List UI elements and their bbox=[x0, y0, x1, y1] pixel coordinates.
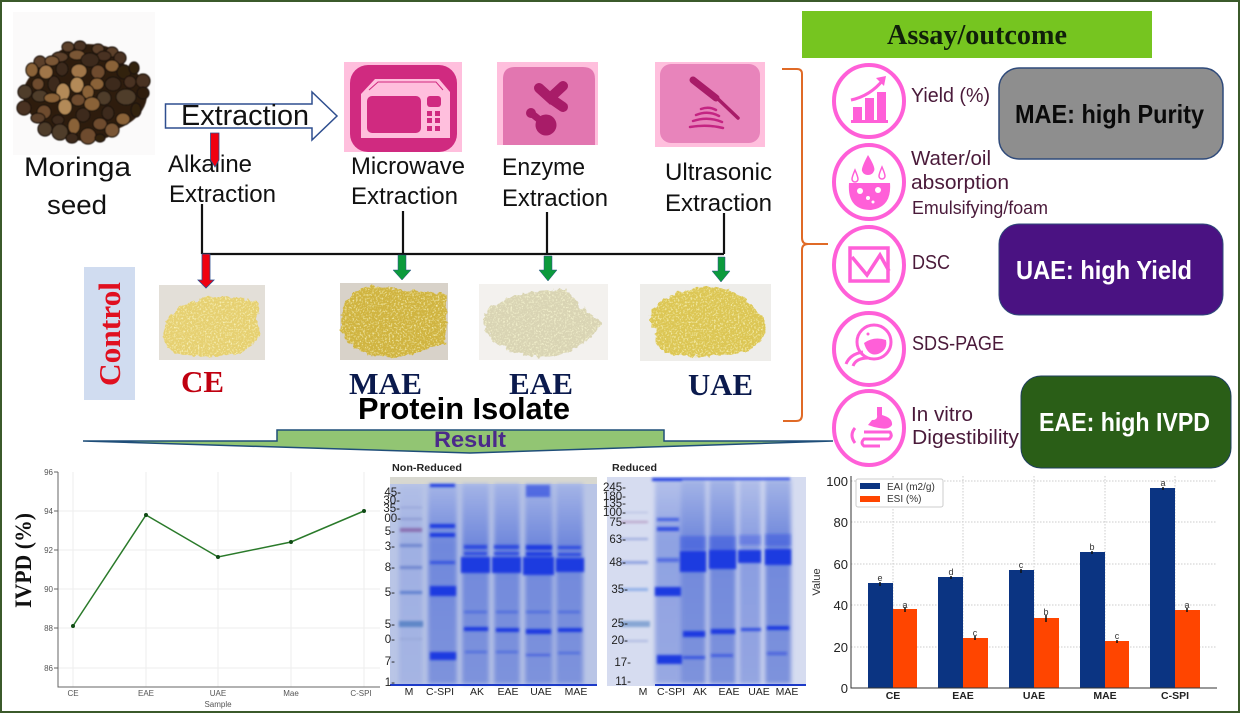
chart: IVPD line chart: C-SPI bbox=[350, 689, 372, 698]
chart: EAI and ESI bar chart: c bbox=[973, 628, 978, 638]
chart: non-reduced SDS-PAGE gel: 3- bbox=[385, 541, 395, 553]
chart: EAI and ESI bar chart: b bbox=[1089, 542, 1095, 552]
label: EAE: EAE bbox=[509, 366, 573, 401]
arrow: green to MAE bbox=[393, 255, 411, 280]
icon: ultrasonic probe bbox=[655, 62, 765, 147]
label: Ultrasonic Extraction: Ultrasonic bbox=[665, 159, 772, 186]
heading: Assay/outcome bbox=[802, 11, 1152, 58]
label: Microwave Extraction: Extraction bbox=[351, 183, 458, 210]
chart: IVPD line chart: 86 bbox=[44, 664, 54, 673]
arrow: red small bbox=[210, 133, 219, 167]
chart: IVPD line chart: Mae bbox=[283, 689, 299, 698]
chart: IVPD line chart: 90 bbox=[44, 585, 54, 594]
chart: non-reduced SDS-PAGE gel bbox=[383, 463, 597, 698]
powder: UAE bbox=[640, 284, 771, 361]
chart: non-reduced SDS-PAGE gel: Non-Reduced bbox=[392, 463, 462, 474]
chart: EAI and ESI bar chart: 40 bbox=[834, 598, 848, 613]
chart: EAI and ESI bar chart: d bbox=[948, 567, 954, 577]
text: Moringa seed: Moringa bbox=[24, 152, 132, 182]
chart: reduced SDS-PAGE gel: 135- bbox=[603, 498, 626, 510]
legend: ESI (%) bbox=[887, 494, 921, 505]
chart: EAI and ESI bar chart: e bbox=[877, 573, 883, 583]
label: water oil absorption emulsifying: absorption bbox=[911, 172, 1009, 194]
bracket bbox=[782, 69, 828, 421]
chart: reduced SDS-PAGE gel: 100- bbox=[603, 507, 626, 519]
chart: IVPD line chart: 94 bbox=[44, 507, 54, 516]
chart: non-reduced SDS-PAGE gel: 8- bbox=[385, 562, 395, 574]
label: Control bbox=[84, 267, 135, 400]
heading: Assay/outcome: Assay/outcome bbox=[887, 19, 1067, 51]
label: Enzyme Extraction: Enzyme bbox=[502, 154, 585, 181]
chart: reduced SDS-PAGE gel: MAE bbox=[776, 686, 798, 698]
chart: non-reduced SDS-PAGE gel: 45- bbox=[384, 487, 401, 499]
chart: reduced SDS-PAGE gel: 63- bbox=[609, 534, 626, 546]
chart: reduced SDS-PAGE gel: 245- bbox=[603, 482, 626, 494]
chart: IVPD line chart: EAE bbox=[138, 689, 154, 698]
label: water oil absorption emulsifying: Water/oil bbox=[911, 148, 991, 170]
chart: reduced SDS-PAGE gel: UAE bbox=[748, 686, 770, 698]
heading: Protein Isolate: Protein Isolate bbox=[358, 391, 570, 426]
callout: UAE high yield: UAE: high Yield bbox=[1016, 255, 1192, 285]
chart: EAI and ESI bar chart: b bbox=[1043, 607, 1049, 617]
icon: SDS-PAGE bbox=[834, 313, 904, 385]
label: yield: Yield (%) bbox=[911, 85, 990, 107]
chart: IVPD line chart: 88 bbox=[44, 624, 54, 633]
chart: reduced SDS-PAGE gel: 20- bbox=[611, 635, 628, 647]
arrow: green to UAE bbox=[712, 257, 730, 282]
arrow: green to EAE bbox=[539, 256, 557, 281]
label: Ultrasonic Extraction bbox=[665, 159, 772, 217]
label: DSC: DSC bbox=[912, 252, 950, 274]
label: Microwave Extraction: Microwave bbox=[351, 153, 465, 180]
arrow: result: Result bbox=[434, 427, 507, 452]
label: in vitro digestibility: In vitro bbox=[911, 404, 973, 426]
chart: non-reduced SDS-PAGE gel: 5- bbox=[385, 526, 395, 538]
chart: EAI and ESI bar chart: c bbox=[1115, 631, 1120, 641]
powder: CE bbox=[159, 285, 265, 360]
chart: non-reduced SDS-PAGE gel: 00- bbox=[384, 513, 401, 525]
chart: EAI and ESI bar chart: UAE bbox=[1023, 690, 1045, 702]
chart: EAI and ESI bar chart: a bbox=[1160, 478, 1166, 488]
chart: IVPD line chart: 92 bbox=[44, 546, 54, 555]
label: Ultrasonic Extraction: Extraction bbox=[665, 190, 772, 217]
chart: reduced SDS-PAGE gel: M bbox=[639, 686, 647, 698]
callout: MAE high purity bbox=[999, 68, 1223, 159]
legend: EAI (m2/g) bbox=[887, 482, 935, 493]
connector lines bbox=[202, 204, 724, 254]
label: UAE: UAE bbox=[688, 367, 753, 402]
legend bbox=[856, 479, 943, 507]
icon: yield bbox=[834, 65, 904, 137]
label: Control: Control bbox=[92, 282, 127, 386]
chart: IVPD line chart: Sample bbox=[204, 700, 232, 709]
chart: IVPD line chart: CE bbox=[67, 689, 79, 698]
chart: non-reduced SDS-PAGE gel: 7- bbox=[385, 656, 395, 668]
chart: reduced SDS-PAGE gel: 11- bbox=[615, 676, 631, 688]
arrow: red to CE bbox=[198, 254, 214, 288]
chart: non-reduced SDS-PAGE gel: 0- bbox=[385, 634, 395, 646]
chart: reduced SDS-PAGE gel bbox=[603, 463, 806, 698]
chart: non-reduced SDS-PAGE gel: EAE bbox=[497, 686, 519, 698]
chart: reduced SDS-PAGE gel: 17- bbox=[614, 657, 631, 669]
chart: non-reduced SDS-PAGE gel: 1- bbox=[385, 677, 395, 689]
icon: microwave bbox=[344, 62, 462, 152]
chart: non-reduced SDS-PAGE gel: C-SPI bbox=[426, 686, 454, 698]
chart: EAI and ESI bar chart: 20 bbox=[834, 640, 848, 655]
arrow: result bbox=[83, 427, 833, 453]
chart: non-reduced SDS-PAGE gel: MAE bbox=[565, 686, 587, 698]
chart: EAI and ESI bar chart: MAE bbox=[1093, 690, 1117, 702]
chart: reduced SDS-PAGE gel: EAE bbox=[718, 686, 740, 698]
label: Alkaline Extraction: Extraction bbox=[169, 181, 276, 208]
icon: water absorption bbox=[834, 145, 904, 219]
label: Microwave Extraction bbox=[351, 153, 465, 210]
icon: moringa seeds photo bbox=[13, 12, 155, 155]
chart: reduced SDS-PAGE gel: Reduced bbox=[612, 463, 657, 474]
chart: IVPD line chart: 96 bbox=[44, 468, 54, 477]
label: MAE: MAE bbox=[349, 366, 422, 401]
chart: EAI and ESI bar chart: Value bbox=[811, 568, 823, 596]
chart: non-reduced SDS-PAGE gel: 5- bbox=[385, 587, 395, 599]
label: water oil absorption emulsifying bbox=[911, 148, 1048, 218]
text: Moringa seed bbox=[24, 152, 132, 220]
text: Moringa seed: seed bbox=[47, 190, 107, 220]
chart: non-reduced SDS-PAGE gel: UAE bbox=[530, 686, 552, 698]
callout: EAE high IVPD bbox=[1021, 376, 1231, 468]
chart: non-reduced SDS-PAGE gel: M bbox=[405, 686, 413, 698]
chart: non-reduced SDS-PAGE gel: 5- bbox=[385, 619, 395, 631]
chart: EAI and ESI bar chart: 80 bbox=[834, 515, 848, 530]
chart: reduced SDS-PAGE gel: 48- bbox=[609, 557, 626, 569]
chart: EAI and ESI bar chart: CE bbox=[886, 690, 900, 702]
label: Alkaline Extraction: Alkaline bbox=[168, 151, 252, 178]
chart: EAI and ESI bar chart: 100 bbox=[826, 474, 848, 489]
chart: non-reduced SDS-PAGE gel: 35- bbox=[383, 503, 400, 515]
arrow: extraction: Extraction bbox=[181, 100, 309, 132]
icon: enzyme bbox=[497, 62, 598, 145]
chart: non-reduced SDS-PAGE gel: 30- bbox=[383, 495, 400, 507]
callout: UAE high yield bbox=[999, 224, 1223, 315]
chart: EAI and ESI bar chart: 60 bbox=[834, 557, 848, 572]
chart: reduced SDS-PAGE gel: 180- bbox=[603, 491, 626, 503]
powder: MAE bbox=[340, 283, 448, 360]
chart: EAI and ESI bar chart bbox=[811, 474, 1217, 702]
icon: DSC bbox=[834, 227, 904, 303]
chart: non-reduced SDS-PAGE gel: AK bbox=[470, 686, 484, 698]
chart: EAI and ESI bar chart: c bbox=[1019, 560, 1024, 570]
chart: EAI and ESI bar chart: EAE bbox=[952, 690, 974, 702]
chart: EAI and ESI bar chart: a bbox=[902, 600, 908, 610]
label: Enzyme Extraction: Extraction bbox=[502, 185, 608, 212]
label: in vitro digestibility: Digestibility bbox=[912, 427, 1019, 449]
label: Enzyme Extraction bbox=[502, 154, 608, 212]
arrow: extraction bbox=[166, 92, 337, 140]
chart: EAI and ESI bar chart: 0 bbox=[841, 681, 848, 696]
chart: IVPD line chart: UAE bbox=[210, 689, 226, 698]
chart: EAI and ESI bar chart: a bbox=[1184, 600, 1190, 610]
icon: digestion bbox=[834, 391, 904, 465]
chart: IVPD line chart: IVPD (%) bbox=[11, 513, 36, 608]
callout: MAE high purity: MAE: high Purity bbox=[1015, 99, 1204, 129]
chart: reduced SDS-PAGE gel: C-SPI bbox=[657, 686, 685, 698]
chart: reduced SDS-PAGE gel: 25- bbox=[611, 618, 628, 630]
powder: EAE bbox=[479, 284, 608, 360]
chart: reduced SDS-PAGE gel: 75- bbox=[609, 517, 626, 529]
label: water oil absorption emulsifying: Emulsifying/foam bbox=[912, 198, 1048, 218]
label: in vitro digestibility bbox=[911, 404, 1019, 449]
label: Alkaline Extraction bbox=[168, 151, 276, 208]
chart: EAI and ESI bar chart: C-SPI bbox=[1161, 690, 1189, 702]
label: SDS-PAGE: SDS-PAGE bbox=[912, 333, 1004, 355]
chart: IVPD line chart bbox=[11, 468, 380, 709]
chart: reduced SDS-PAGE gel: 35- bbox=[611, 584, 628, 596]
callout: EAE high IVPD: EAE: high IVPD bbox=[1039, 407, 1210, 437]
chart: reduced SDS-PAGE gel: AK bbox=[693, 686, 707, 698]
label: CE: CE bbox=[181, 364, 224, 399]
